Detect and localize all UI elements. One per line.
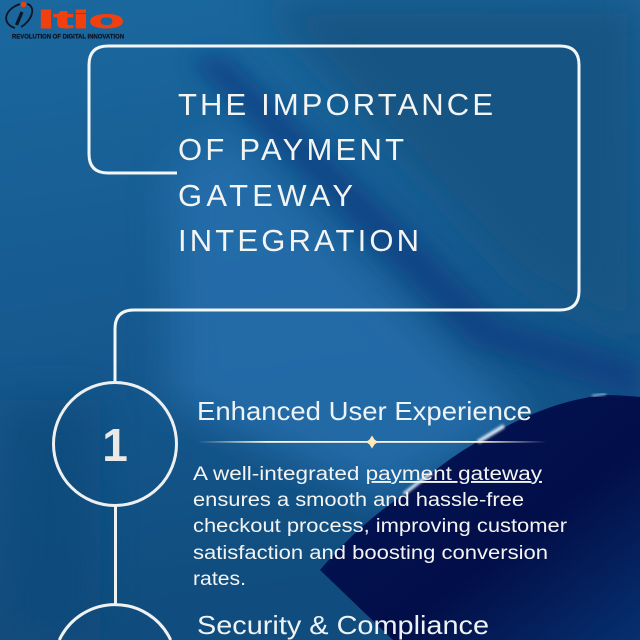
title <box>178 87 493 258</box>
timeline connector between steps <box>114 506 117 604</box>
logo wordmark: ltio <box>38 6 124 34</box>
step 1 circle <box>54 382 176 506</box>
step 1 body text: A well-integrated payment gateway <box>193 464 543 485</box>
logo icon: swoosh i <box>6 2 32 28</box>
step 1 body text: rates. <box>193 569 246 590</box>
step 1 heading: Enhanced User Experience <box>197 396 532 426</box>
step 1 body text <box>193 464 568 590</box>
title: INTEGRATION <box>178 223 419 258</box>
title: GATEWAY <box>178 178 353 213</box>
title: THE IMPORTANCE <box>178 87 493 122</box>
step 1 body text: checkout process, improving customer <box>193 516 568 537</box>
title: OF PAYMENT <box>178 132 404 167</box>
step 2 circle (cropped) <box>59 605 171 640</box>
logo: Iltio <box>6 2 124 40</box>
step 2 heading: Security & Compliance <box>197 610 489 640</box>
step 1 body text: satisfaction and boosting conversion <box>193 543 548 564</box>
step 1 number: 1 <box>102 419 128 471</box>
logo tagline: REVOLUTION OF DIGITAL INNOVATION <box>12 34 124 40</box>
step 1 body text: ensures a smooth and hassle-free <box>193 490 524 511</box>
dark curved shape, lower right <box>320 394 640 640</box>
title frame and timeline connector <box>89 46 579 383</box>
divider with diamond <box>197 436 547 448</box>
